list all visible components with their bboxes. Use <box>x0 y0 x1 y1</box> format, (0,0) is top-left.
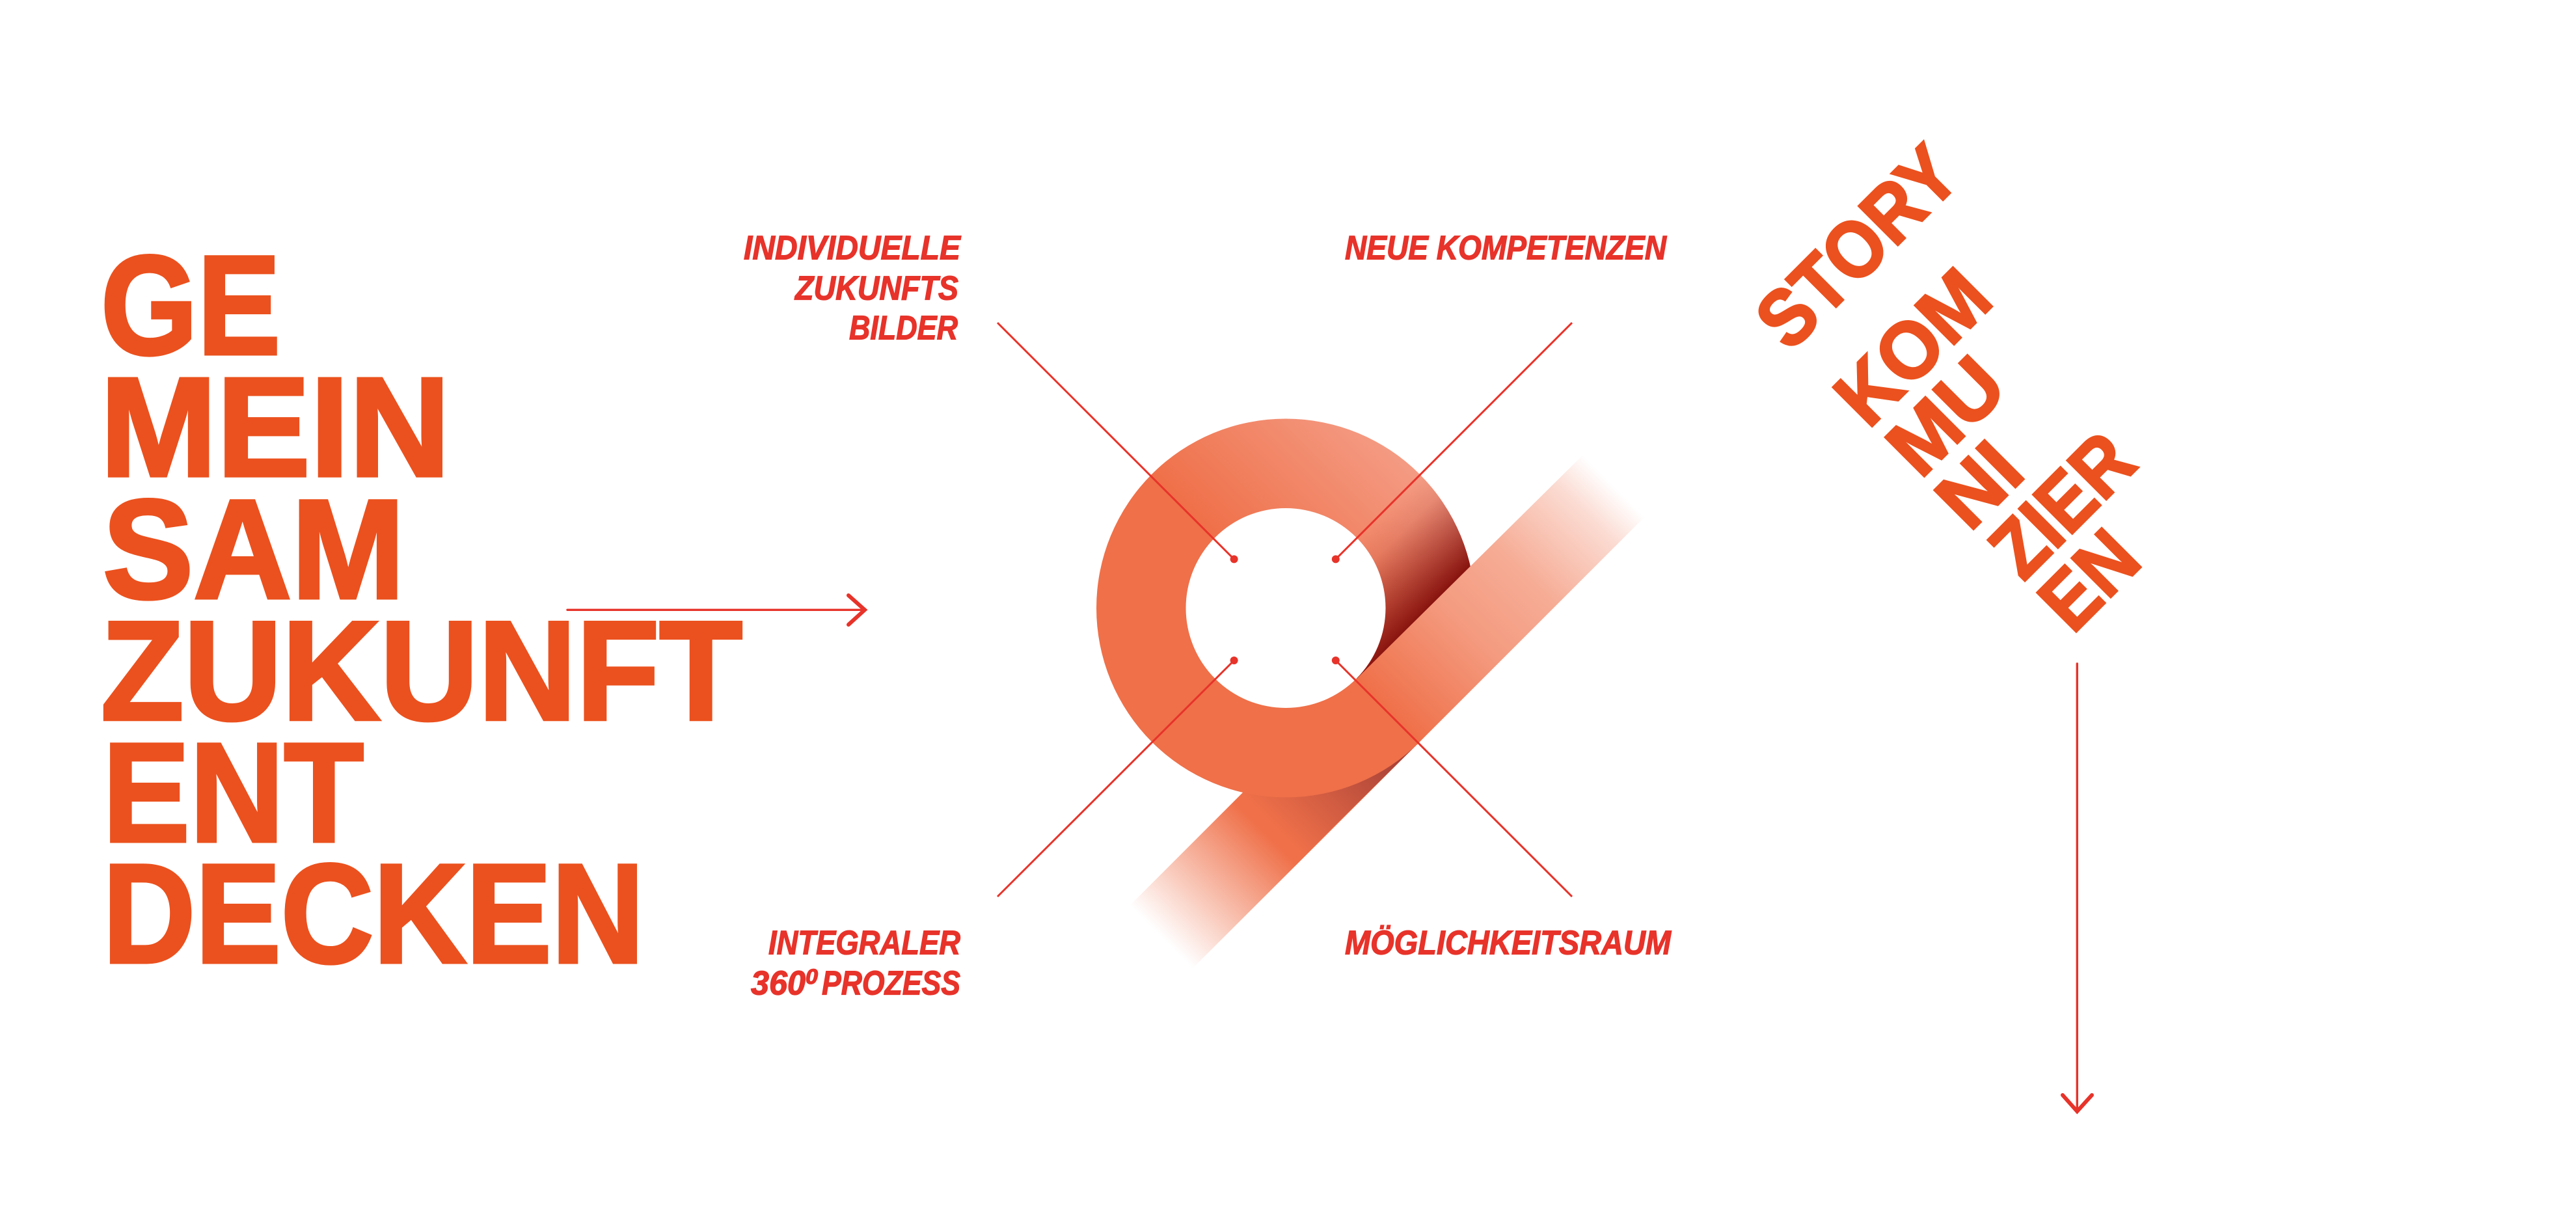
infographic canvas <box>103 139 2142 1114</box>
rotated heading: Story kommunizieren: STORY <box>1739 128 1976 366</box>
label: individuelle zukunftsbilder <box>744 229 961 347</box>
label: integraler 360 prozess <box>751 924 960 1002</box>
label: individuelle zukunftsbilder: BILDER <box>849 310 958 347</box>
band shadow under ring <box>1223 679 1420 874</box>
title: Gemeinsam Zukunft entdecken: ENT <box>103 714 364 871</box>
diagram: ring with diagonal band <box>1096 419 1645 968</box>
rotated heading: Story kommunizieren: ZIER <box>1972 415 2152 595</box>
arrow: downwards from heading <box>2063 664 2092 1111</box>
title: Gemeinsam Zukunft entdecken: SAM <box>103 470 405 628</box>
title: Gemeinsam Zukunft entdecken: MEIN <box>100 348 450 506</box>
title: Gemeinsam Zukunft entdecken: DECKEN <box>103 835 644 992</box>
label: integraler 360 prozess: 360 <box>751 964 806 1002</box>
label: möglichkeitsraum: MÖGLICHKEITSRAUM <box>1345 924 1672 962</box>
label: integraler 360 prozess: INTEGRALER <box>768 924 960 962</box>
title: Gemeinsam Zukunft entdecken: ZUKUNFT <box>101 592 742 750</box>
label: individuelle zukunftsbilder: ZUKUNFTS <box>794 269 958 307</box>
rotated heading: Story kommunizieren: EN <box>2022 513 2157 648</box>
band upper section <box>1353 455 1645 745</box>
band lower section <box>1130 679 1420 968</box>
ring <box>1096 419 1475 797</box>
rotated heading: Story kommunizieren: MU <box>1869 340 2022 493</box>
label: integraler 360 prozess: 0 <box>806 965 818 988</box>
title: Gemeinsam Zukunft entdecken: GE <box>101 226 280 384</box>
label: integraler 360 prozess: PROZESS <box>822 964 960 1002</box>
label: individuelle zukunftsbilder: INDIVIDUELLE <box>744 229 961 267</box>
arrow: title to diagram <box>567 595 865 625</box>
rotated heading: Story kommunizieren: KOM <box>1817 252 2009 442</box>
label: neue kompetenzen: NEUE KOMPETENZEN <box>1345 229 1667 267</box>
rotated heading: Story kommunizieren: NI <box>1919 424 2040 546</box>
connector lines with dots <box>997 323 1572 897</box>
rotated heading: Story kommunizieren <box>1739 128 2258 648</box>
title: Gemeinsam Zukunft entdecken <box>100 226 742 992</box>
ring shadow behind band <box>1356 487 1471 679</box>
